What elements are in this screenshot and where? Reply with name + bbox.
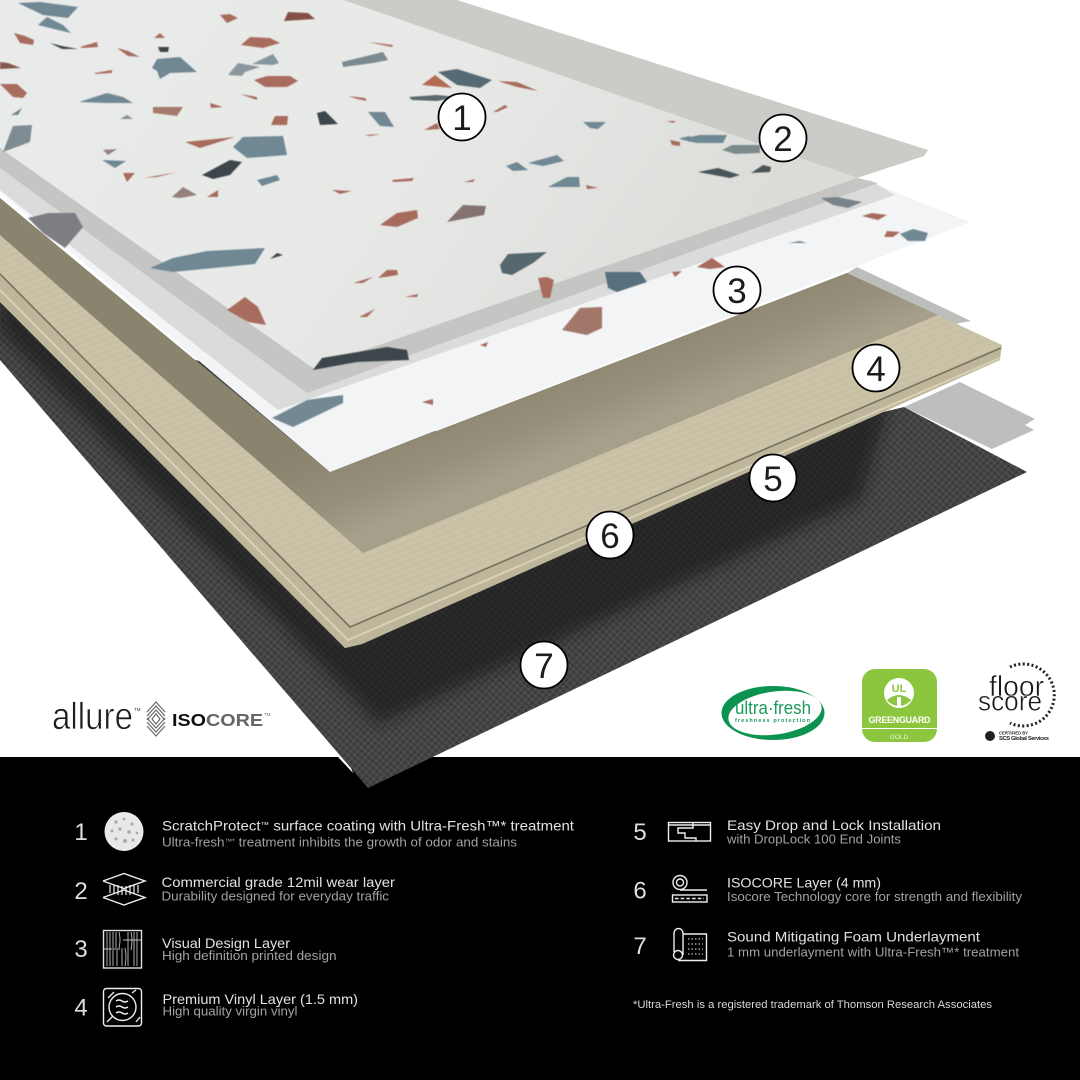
layer 3: visual design layer bbox=[0, 140, 970, 472]
logo: greenguard gold: UL bbox=[892, 683, 907, 695]
legend row 4: Premium Vinyl Layer (1.5 mm) bbox=[162, 991, 358, 1007]
number marker 4 bbox=[852, 344, 900, 392]
legend row 1: Ultra-fresh bbox=[162, 836, 220, 850]
number marker 5: 5 bbox=[763, 460, 783, 499]
layer 2: wear layer bbox=[0, 0, 928, 410]
legend row 7: 7 bbox=[633, 933, 647, 960]
number marker 6: 6 bbox=[600, 517, 620, 556]
legend row 4: 4 bbox=[74, 994, 88, 1022]
legend row 4: High quality virgin vinyl bbox=[162, 1004, 298, 1018]
black legend panel bbox=[0, 757, 1080, 1080]
icon: rolled core bbox=[672, 876, 707, 902]
logo: ultra-fresh: ultra·fresh bbox=[735, 697, 811, 718]
logo: floorscore: score bbox=[978, 686, 1042, 716]
logo: ultra-fresh bbox=[722, 685, 825, 741]
icon: drop lock joint bbox=[668, 822, 710, 841]
terrazzo chips: red bbox=[0, 12, 900, 405]
number marker 6 bbox=[586, 512, 634, 558]
number marker 1 bbox=[438, 94, 486, 140]
legend row 2: Commercial grade 12mil wear layer bbox=[162, 874, 395, 890]
number marker 2 bbox=[760, 114, 806, 162]
icon: wood grain print bbox=[104, 930, 142, 968]
legend row 6: ISOCORE Layer (4 mm) bbox=[727, 874, 881, 890]
legend row 3 bbox=[74, 930, 337, 968]
legend row 2: 2 bbox=[74, 878, 88, 905]
legend row 7: Sound Mitigating Foam Underlayment bbox=[727, 928, 980, 944]
legend row 1: 1 bbox=[74, 819, 88, 846]
footnote: *Ultra-Fresh is a registered trademark of Thomson Research Associates bbox=[633, 999, 993, 1011]
legend row 1: treatment inhibits the growth of odor and stains bbox=[235, 836, 517, 850]
terrazzo chips: dark bbox=[50, 43, 771, 370]
number marker 7: 7 bbox=[534, 647, 554, 686]
legend row 6: Isocore Technology core for strength and flexibility bbox=[727, 890, 1023, 904]
logo: floorscore: SCS Global Services bbox=[999, 736, 1049, 742]
logo: allure isocore: ISOCORE bbox=[172, 710, 263, 730]
legend row 3: Visual Design Layer bbox=[162, 935, 290, 951]
number marker 5 bbox=[750, 454, 796, 502]
legend row 2: Durability designed for everyday traffic bbox=[162, 890, 389, 904]
logo: allure isocore: TM bbox=[264, 712, 271, 717]
legend row 5: Easy Drop and Lock Installation bbox=[727, 817, 941, 833]
number marker 3: 3 bbox=[727, 272, 747, 311]
legend row 1 bbox=[74, 812, 574, 851]
legend row 1: ™* bbox=[224, 838, 235, 846]
legend row 1: surface coating with Ultra-Fresh™* treatment bbox=[269, 818, 574, 834]
logo: floorscore bbox=[978, 664, 1054, 742]
legend row 7 bbox=[633, 928, 1020, 960]
legend row 6: 6 bbox=[633, 878, 647, 904]
legend row 6 bbox=[633, 874, 1023, 904]
layer 6 and 5: isocore core with drop and lock edge bbox=[0, 198, 1002, 648]
legend row 5: with DropLock 100 End Joints bbox=[726, 832, 901, 846]
logo: greenguard gold: GREENGUARD bbox=[868, 715, 931, 725]
terrazzo chips: slate bbox=[3, 2, 928, 427]
layer 1: scratchprotect surface bbox=[0, 0, 857, 368]
number marker 7 bbox=[520, 642, 568, 688]
logo: floorscore: floor bbox=[989, 671, 1044, 703]
legend row 5: 5 bbox=[633, 819, 647, 846]
logo: floorscore: CERTIFIED BY bbox=[999, 730, 1028, 736]
legend row 7: 1 mm underlayment with Ultra-Fresh™* treatment bbox=[727, 946, 1020, 960]
icon: vinyl pellet bbox=[104, 988, 142, 1026]
legend row 1: ScratchProtect bbox=[162, 818, 254, 834]
icon: water beads on surface bbox=[104, 812, 144, 851]
logo: allure isocore bbox=[52, 696, 271, 738]
legend row 1: ™ bbox=[261, 820, 269, 830]
layer 7: foam underlayment bbox=[0, 290, 1035, 788]
logo: allure isocore: allure bbox=[52, 696, 133, 738]
number marker 2: 2 bbox=[773, 120, 793, 159]
legend row 3: High definition printed design bbox=[162, 949, 337, 963]
logo: greenguard gold: GOLD bbox=[890, 734, 909, 741]
logo: ultra-fresh: freshness protection bbox=[735, 718, 811, 724]
number marker 3 bbox=[714, 266, 760, 314]
legend row 5 bbox=[633, 817, 941, 846]
logo: greenguard gold bbox=[862, 669, 937, 742]
icon: foam roll bbox=[674, 928, 706, 960]
icon: stacked wear layers bbox=[103, 874, 145, 905]
number marker 4: 4 bbox=[866, 350, 886, 389]
logo: allure isocore: TM bbox=[134, 707, 141, 712]
legend row 3: 3 bbox=[74, 936, 88, 963]
legend row 4 bbox=[74, 988, 358, 1026]
number marker 1: 1 bbox=[452, 99, 472, 138]
legend row 2 bbox=[74, 874, 395, 905]
